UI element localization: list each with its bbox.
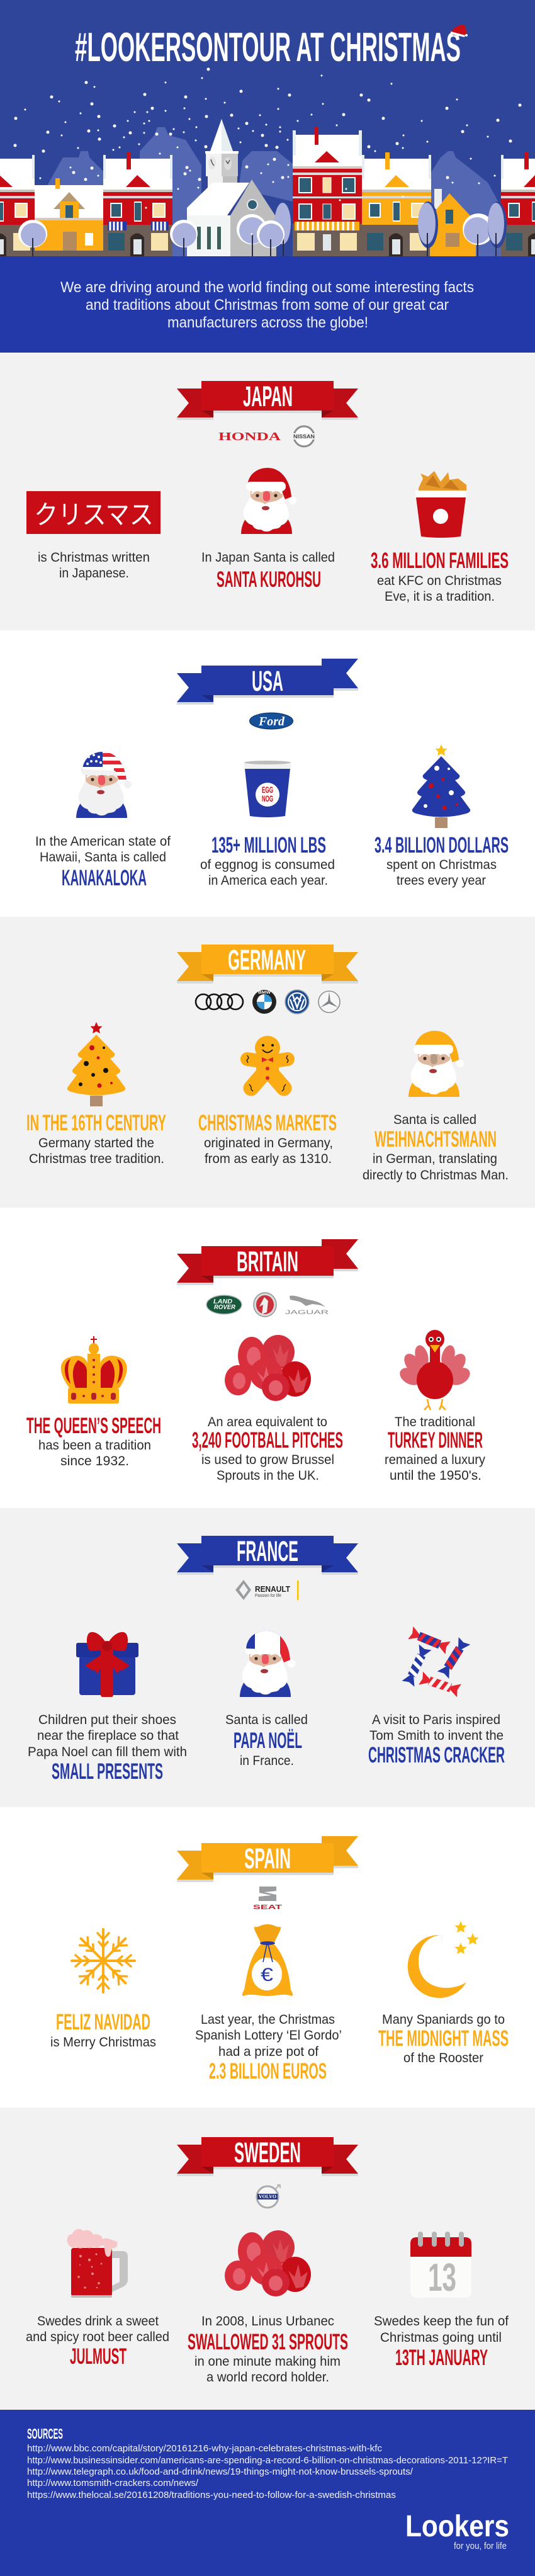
banner: Britain xyxy=(177,1239,358,1285)
text: Weihnachtsmann: directly to Christmas Man. xyxy=(363,1168,509,1183)
text: turkey dinner: The traditional xyxy=(395,1415,475,1429)
logo: SEAT: SEAT xyxy=(253,1904,282,1911)
panel: Sweden xyxy=(0,2108,535,2410)
section background xyxy=(0,2108,535,2410)
text: Feliz Navidad: FELIZ NAVIDAD xyxy=(56,2010,150,2034)
section background xyxy=(0,917,535,1208)
text: Christmas cracker: Tom Smith to invent the xyxy=(369,1728,504,1743)
sources heading: SOURCES xyxy=(27,2426,63,2442)
panel: Spain xyxy=(0,1807,535,2108)
banner: Spain: SPAIN xyxy=(244,1842,291,1875)
text: football pitches: Sprouts in the UK. xyxy=(217,1468,319,1483)
text: football pitches: 3,240 FOOTBALL PITCHES xyxy=(192,1428,343,1453)
town illustration xyxy=(0,69,535,256)
panel: header xyxy=(0,0,535,353)
text: Julmust: Swedes drink a sweet xyxy=(37,2314,159,2329)
text: Christmas markets xyxy=(198,1111,337,1166)
text: Santa Kurohsu xyxy=(201,550,335,592)
icon: euro money bag: € xyxy=(261,1965,273,1985)
icon: brussels sprouts xyxy=(225,1335,311,1401)
text: Queen's speech: has been a tradition xyxy=(38,1438,151,1453)
banner: Germany: GERMANY xyxy=(228,944,306,976)
text: KFC families: Eve, it is a tradition. xyxy=(385,589,495,604)
section background xyxy=(0,1807,535,2108)
text: Julmust: JULMUST xyxy=(70,2344,127,2369)
banner: USA: USA xyxy=(252,665,283,697)
logo: Ford: Ford xyxy=(258,715,285,729)
church xyxy=(187,119,276,256)
falling snow xyxy=(15,69,520,234)
logo: SEAT xyxy=(253,1887,282,1911)
yellow cottage xyxy=(35,178,104,256)
panel: Germany xyxy=(0,917,535,1208)
section background xyxy=(0,1208,535,1508)
text: Christmas markets: CHRISTMAS MARKETS xyxy=(198,1111,337,1135)
logos: Land Rover, Vauxhall, Jaguar: JAGUAR xyxy=(285,1309,329,1315)
icon: snowflake xyxy=(72,1929,135,1992)
text: Queen's speech: since 1932. xyxy=(60,1454,129,1468)
text: Christmas cracker xyxy=(368,1713,505,1767)
text: small presents xyxy=(28,1713,187,1784)
small yellow house xyxy=(430,189,476,256)
logo: Renault: Passion for life xyxy=(255,1594,281,1598)
icon: eggnog cup: NOG xyxy=(262,793,273,803)
text: 16th century xyxy=(26,1111,166,1166)
intro text: We are driving around the world finding out some interesting facts xyxy=(60,279,474,296)
banner: Japan xyxy=(177,380,358,420)
section background xyxy=(0,630,535,917)
text: Weihnachtsmann xyxy=(363,1113,509,1183)
icon: tricolour santa xyxy=(240,1630,295,1697)
banner: France: FRANCE xyxy=(237,1535,298,1567)
sources list: https://www.thelocal.se/20161208/traditions-you-need-to-follow-for-a-swedish-christmas xyxy=(27,2490,396,2500)
text: 31 sprouts: In 2008, Linus Urbanec xyxy=(201,2314,334,2329)
icon: katakana Christmas box: クリスマス xyxy=(34,494,154,532)
text: small presents: Papa Noel can fill them with xyxy=(28,1745,187,1759)
text: turkey dinner: until the 1950's. xyxy=(390,1468,482,1483)
text: 13th January: Swedes keep the fun of xyxy=(374,2314,509,2329)
panel: France xyxy=(0,1508,535,1807)
text: eggnog: of eggnog is consumed xyxy=(200,858,335,872)
icon: stars and stripes santa xyxy=(76,751,132,818)
intro band xyxy=(0,256,535,353)
intro text: manufacturers across the globe! xyxy=(167,314,368,331)
text: 31 sprouts xyxy=(188,2314,348,2385)
panel: Japan xyxy=(0,353,535,630)
text: 16th century: Germany started the xyxy=(38,1136,154,1150)
text: eggnog: in America each year. xyxy=(208,873,328,888)
text: Julmust xyxy=(26,2314,169,2369)
icon: crescent moon and stars xyxy=(408,1921,478,1998)
logos: Honda, Nissan: NISSAN xyxy=(293,434,315,440)
text: Papa Noel xyxy=(225,1713,308,1768)
icon: euro money bag xyxy=(242,1924,293,1996)
text: Papa Noel: Santa is called xyxy=(225,1713,308,1727)
tall red house xyxy=(293,127,362,256)
text: Weihnachtsmann: in German, translating xyxy=(373,1152,497,1166)
text: KFC families xyxy=(371,548,509,604)
banner: USA xyxy=(177,659,358,705)
logos: Audi, BMW, VW, Mercedes: BMW xyxy=(258,991,271,995)
icon: gift box xyxy=(76,1632,138,1697)
icon: yellow santa xyxy=(408,1031,464,1097)
intro text xyxy=(60,279,474,331)
sources list xyxy=(27,2443,508,2500)
text: 31 sprouts: in one minute making him xyxy=(194,2354,341,2369)
text: eggnog: 135+ MILLION LBS xyxy=(211,833,326,858)
text: Queen's speech xyxy=(26,1414,161,1468)
icon: santa hat on title xyxy=(451,25,468,37)
text: Santa Kurohsu: SANTA KUROHSU xyxy=(217,567,321,592)
logo: Renault xyxy=(235,1580,298,1600)
text: midnight mass xyxy=(378,2012,509,2065)
logos: Land Rover, Vauxhall, Jaguar: ROVER xyxy=(214,1304,236,1311)
banner: Sweden xyxy=(177,2136,358,2176)
text: 16th century: IN THE 16TH CENTURY xyxy=(26,1111,166,1135)
text: 13th January xyxy=(374,2314,509,2370)
banner: France xyxy=(177,1535,358,1575)
banner: Germany xyxy=(177,944,358,984)
text: El Gordo: Spanish Lottery ‘El Gordo’ xyxy=(195,2028,342,2043)
text: football pitches: An area equivalent to xyxy=(208,1415,327,1429)
icon: KFC bucket xyxy=(415,471,466,538)
text: Kanakaloka: In the American state of xyxy=(35,834,171,849)
text: Kanakaloka xyxy=(35,834,171,890)
text: eggnog xyxy=(200,833,335,888)
text: katakana caption: in Japanese. xyxy=(59,566,129,581)
text: katakana caption: is Christmas written xyxy=(38,550,150,565)
text: 13th January: Christmas going until xyxy=(380,2330,502,2345)
icon: yellow Christmas tree xyxy=(67,1022,125,1106)
text: KFC families: eat KFC on Christmas xyxy=(377,574,502,588)
section background xyxy=(0,1508,535,1807)
icon: turkey xyxy=(397,1330,473,1410)
icon: calendar xyxy=(410,2232,471,2300)
text: small presents: SMALL PRESENTS xyxy=(52,1759,163,1784)
text: Kanakaloka: Hawaii, Santa is called xyxy=(40,850,166,865)
section background xyxy=(0,353,535,630)
snowy trees xyxy=(18,201,507,256)
text: 31 sprouts: a world record holder. xyxy=(206,2370,329,2385)
text: Christmas markets: originated in Germany, xyxy=(204,1136,333,1150)
banner: Britain: BRITAIN xyxy=(237,1245,298,1278)
sources list: http://www.businessinsider.com/americans-are-spending-a-record-6-billion-on-christmas-decorations-2011-12?IR=T xyxy=(27,2455,508,2466)
logos: Honda, Nissan xyxy=(218,426,316,446)
icon: santa xyxy=(241,468,296,534)
text: El Gordo: Last year, the Christmas xyxy=(201,2012,335,2027)
banner: Japan: JAPAN xyxy=(243,380,293,412)
logo: Lookers: Lookers xyxy=(405,2510,509,2543)
sources list: http://www.bbc.com/capital/story/20161216-why-japan-celebrates-christmas-with-kfc xyxy=(27,2443,382,2454)
text: small presents: near the fireplace so that xyxy=(37,1728,179,1743)
text: tree spend: spent on Christmas xyxy=(386,858,497,872)
logos: Audi, BMW, VW, Mercedes xyxy=(196,990,340,1014)
text: 31 sprouts: SWALLOWED 31 SPROUTS xyxy=(188,2330,348,2354)
text: El Gordo xyxy=(195,2012,342,2084)
text: Christmas cracker: A visit to Paris inspired xyxy=(372,1713,500,1727)
panel: footer xyxy=(0,2410,535,2576)
text: Feliz Navidad: is Merry Christmas xyxy=(50,2035,156,2050)
night sky xyxy=(0,0,535,257)
text: Papa Noel: PAPA NOËL xyxy=(234,1728,302,1753)
icon: eggnog cup: EGG xyxy=(262,785,273,795)
panel: Britain xyxy=(0,1208,535,1508)
text: Kanakaloka: KANAKALOKA xyxy=(62,866,147,890)
icon: brussels sprouts xyxy=(225,2230,311,2296)
icon: gingerbread man xyxy=(247,1036,288,1091)
text: 16th century: Christmas tree tradition. xyxy=(29,1152,164,1166)
text: small presents: Children put their shoes xyxy=(38,1713,176,1727)
icon: blue Christmas tree xyxy=(412,744,470,828)
text: turkey dinner: remained a luxury xyxy=(385,1453,485,1467)
text: turkey dinner xyxy=(385,1415,485,1483)
text: Papa Noel: in France. xyxy=(240,1754,294,1768)
logos: Honda, Nissan: HONDA xyxy=(218,430,281,443)
text: tree spend xyxy=(374,833,509,888)
logo: Volvo: VOLVO xyxy=(259,2194,276,2199)
panel: USA xyxy=(37,659,509,888)
text: Santa Kurohsu: In Japan Santa is called xyxy=(201,550,335,565)
text: Queen's speech: THE QUEEN’S SPEECH xyxy=(26,1414,161,1438)
banner: Spain xyxy=(177,1836,358,1882)
text: football pitches: is used to grow Brussel xyxy=(201,1453,334,1467)
logo: Renault: RENAULT xyxy=(255,1584,290,1594)
sources list: http://www.tomsmith-crackers.com/news/ xyxy=(27,2478,199,2488)
text: Julmust: and spicy root beer called xyxy=(26,2330,169,2344)
text: midnight mass: of the Rooster xyxy=(403,2051,483,2065)
logos: Land Rover, Vauxhall, Jaguar: LAND xyxy=(213,1298,232,1305)
text: football pitches xyxy=(192,1415,343,1483)
text: El Gordo: had a prize pot of xyxy=(218,2045,318,2059)
awnings xyxy=(108,222,169,230)
logos: Land Rover, Vauxhall, Jaguar xyxy=(206,1293,329,1317)
sources list: http://www.telegraph.co.uk/food-and-drink/news/19-things-might-not-know-brussels-sprouts/ xyxy=(27,2466,414,2477)
logo: Ford xyxy=(249,713,293,729)
footer background xyxy=(0,2410,535,2576)
text: katakana caption xyxy=(38,550,150,581)
icon: crown xyxy=(61,1336,127,1404)
text: Weihnachtsmann: Santa is called xyxy=(393,1113,476,1127)
text: El Gordo: 2.3 BILLION EUROS xyxy=(209,2059,327,2084)
banner: Sweden: SWEDEN xyxy=(234,2136,301,2169)
text: Feliz Navidad xyxy=(50,2010,156,2050)
logo: Volvo xyxy=(257,2185,280,2208)
intro text: and traditions about Christmas from some of our great car xyxy=(86,297,449,314)
text: midnight mass: Many Spaniards go to xyxy=(382,2012,505,2027)
icon: christmas crackers xyxy=(402,1626,470,1697)
text: Christmas markets: from as early as 1310. xyxy=(205,1152,332,1166)
icon: calendar: 13 xyxy=(428,2256,456,2300)
text: tree spend: trees every year xyxy=(397,873,486,888)
logo: Lookers: for you, for life xyxy=(454,2541,507,2551)
icon: julmust mug xyxy=(67,2229,128,2298)
icon: eggnog cup xyxy=(244,761,291,817)
